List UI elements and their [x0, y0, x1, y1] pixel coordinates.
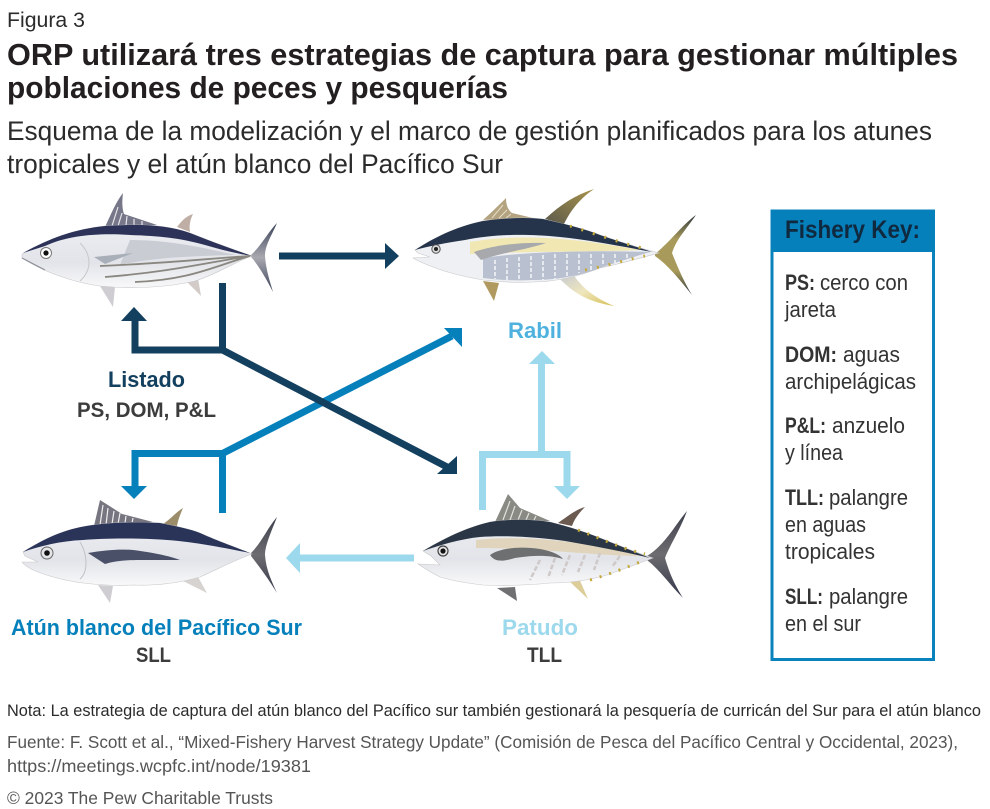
key heading: Fishery Key:: [785, 216, 920, 244]
label: Listado: PS, DOM, P&L: [77, 399, 216, 422]
copyright: © 2023 The Pew Charitable Trusts: [7, 788, 273, 808]
key entry: SLL: en el sur: [785, 611, 861, 636]
icon: albacore tuna (Atún blanco): [22, 500, 277, 603]
label: Patudo: Patudo: [502, 615, 578, 640]
key entry: P&L: P&L:: [785, 413, 826, 438]
key entry: DOM: [785, 342, 916, 394]
arrow: Listado to Patudo and Listado: [121, 283, 457, 474]
title: ORP utilizará tres estrategias de captura para gestionar múltiples: [7, 37, 958, 72]
key entry: PS: [784, 270, 908, 322]
key entry: SLL: palangre: [829, 584, 908, 609]
arrow: Atún blanco to Rabil and Atún blanco: [121, 328, 462, 513]
icon: yellowfin tuna (Rabil): [413, 189, 696, 306]
subtitle: tropicales y el atún blanco del Pacífico Sur: [7, 149, 503, 179]
title: [7, 37, 958, 105]
label: Patudo: [502, 615, 578, 667]
title: poblaciones de peces y pesquerías: [7, 70, 508, 105]
label: Patudo: TLL: [527, 644, 562, 667]
key entry: DOM: archipelágicas: [785, 369, 916, 394]
key entry: DOM: aguas: [843, 342, 900, 367]
key entry: P&L: [785, 413, 905, 465]
key entry: DOM: DOM:: [785, 342, 837, 367]
panel: Fishery Key: [771, 210, 935, 660]
figure label: Figura 3: [7, 9, 85, 32]
source: Fuente: F. Scott et al., “Mixed-Fishery Harvest Strategy Update” (Comisión de Pesca del Pacífico Central y Occidental, 2023),: [7, 732, 958, 752]
arrow: Listado to Rabil: [279, 243, 399, 269]
key entry: TLL: palangre: [829, 485, 908, 510]
label: Listado: Listado: [108, 367, 185, 392]
key entry: TLL: tropicales: [785, 539, 875, 564]
label: Atún blanco del Pacífico Sur: Atún blanco del Pacífico Sur: [11, 615, 302, 640]
key entry: TLL: en aguas: [785, 512, 866, 537]
icon: skipjack tuna (Listado): [22, 193, 277, 307]
label: Atún blanco del Pacífico Sur: SLL: [136, 644, 171, 667]
key entry: TLL: TLL:: [785, 485, 824, 510]
key entry: SLL: SLL:: [785, 584, 823, 609]
subtitle: Esquema de la modelización y el marco de gestión planificados para los atunes: [7, 116, 932, 146]
label: Rabil: Rabil: [508, 318, 562, 343]
key entry: TLL: [785, 485, 908, 564]
arrow: Patudo to Atún blanco: [286, 543, 414, 573]
arrow: Patudo to Rabil and Patudo: [482, 351, 580, 510]
label: Atún blanco del Pacífico Sur: [11, 615, 302, 667]
key entry: P&L: anzuelo: [832, 413, 905, 438]
subtitle: [7, 116, 932, 179]
label: Listado: [77, 367, 216, 422]
source: [7, 732, 958, 776]
key entry: SLL: [785, 584, 908, 636]
icon: bigeye tuna (Patudo): [418, 494, 687, 601]
key entry: PS: PS:: [785, 270, 815, 295]
key entry: PS: cerco con: [820, 270, 908, 295]
key entry: PS: jareta: [784, 297, 837, 322]
key entry: P&L: y línea: [785, 440, 844, 465]
source: https://meetings.wcpfc.int/node/19381: [7, 756, 311, 776]
